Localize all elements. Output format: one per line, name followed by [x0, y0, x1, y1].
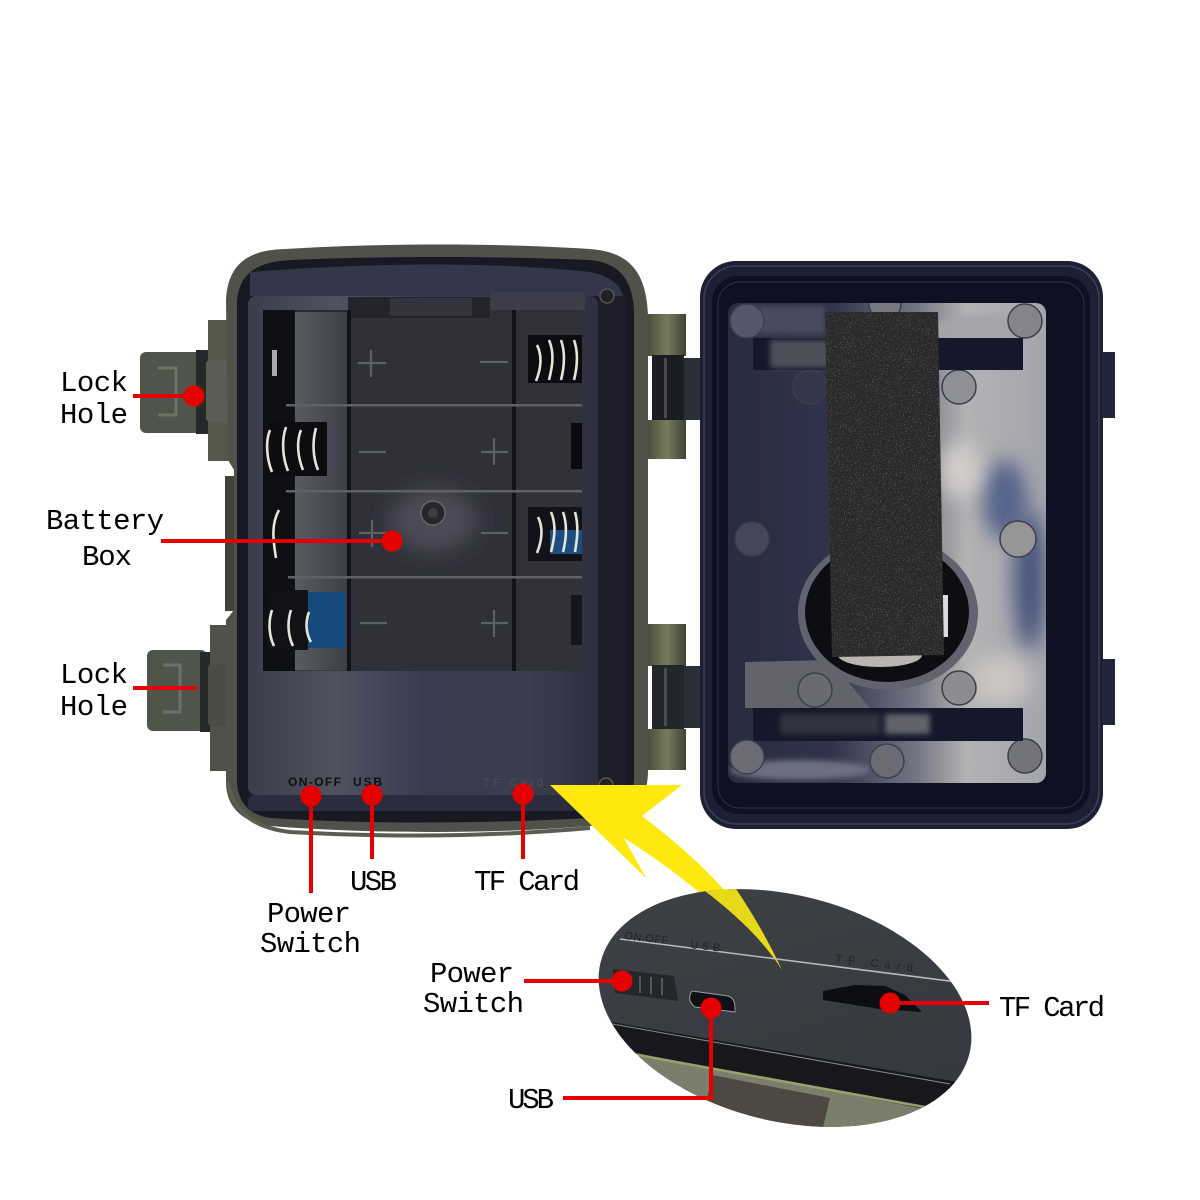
- lower camo band: [628, 1045, 943, 1127]
- port labels on body: ON-OFF: [288, 775, 341, 789]
- callout: power switch on body: Switch: [260, 928, 361, 961]
- callout: lower lock hole: [60, 659, 197, 724]
- close-up labels: ON OFF: [624, 930, 669, 947]
- callout: power switch close-up: Power: [430, 958, 514, 991]
- lower lock latch: [147, 625, 238, 771]
- close-up labels: USB: [690, 939, 721, 955]
- port labels on body: TF Card: [483, 777, 543, 789]
- lid lip: [228, 782, 590, 835]
- right hinges of body: [648, 314, 706, 770]
- left camera body: [140, 244, 706, 835]
- callout: power switch on body: Power: [267, 898, 351, 931]
- TF card slot: [823, 985, 922, 1012]
- infographic: trail camera interior diagram: [48, 244, 1115, 1127]
- callout: USB on body: [350, 784, 397, 899]
- springs: [267, 335, 582, 650]
- callout: upper lock hole: [60, 367, 204, 432]
- dividers: [286, 404, 582, 578]
- callout: lower lock hole: Lock: [60, 659, 128, 692]
- callout: lower lock hole: Hole: [60, 691, 128, 724]
- screws: [599, 289, 614, 792]
- upper lock latch: [140, 320, 238, 461]
- callout: USB close-up: [508, 998, 722, 1117]
- callout: TF card close-up: [880, 992, 1105, 1025]
- battery screw: [421, 501, 445, 525]
- micro USB port: [690, 991, 735, 1012]
- callout: power switch on body: [260, 786, 361, 961]
- callout: TF card on body: TF Card: [474, 866, 580, 899]
- port labels on body: [288, 775, 543, 789]
- mounting plate: [728, 288, 1046, 786]
- foam pad: [825, 312, 944, 657]
- callout: battery box: Battery: [46, 505, 164, 538]
- standoff pegs: [730, 288, 1042, 778]
- callout: upper lock hole: Hole: [60, 399, 128, 432]
- right camera door: [700, 261, 1115, 829]
- port labels on body: USB: [353, 775, 382, 789]
- callout: USB close-up: USB: [508, 1084, 554, 1117]
- round opening: [798, 552, 978, 690]
- close-up labels: TF Card: [835, 953, 914, 974]
- callout: TF card close-up: TF Card: [999, 992, 1105, 1025]
- detail lens: port close-up: [598, 889, 972, 1127]
- callout: power switch close-up: Switch: [423, 988, 524, 1021]
- callout: battery box: Box: [82, 541, 132, 574]
- yellow arrow: [550, 785, 780, 968]
- callout: power switch close-up: [423, 958, 632, 1021]
- callout: USB on body: USB: [350, 866, 397, 899]
- body shell: [226, 244, 648, 832]
- arrow tip over lens: [705, 889, 782, 970]
- inner cover plate: [248, 296, 598, 795]
- callout: TF card on body: [474, 784, 580, 899]
- slots: [753, 338, 1023, 741]
- callout: battery box: [46, 505, 402, 574]
- callout: upper lock hole: Lock: [60, 367, 128, 400]
- close-up labels: [624, 930, 914, 974]
- power switch: [613, 969, 678, 1001]
- polarity marks: [358, 350, 508, 637]
- battery compartment: [263, 292, 585, 671]
